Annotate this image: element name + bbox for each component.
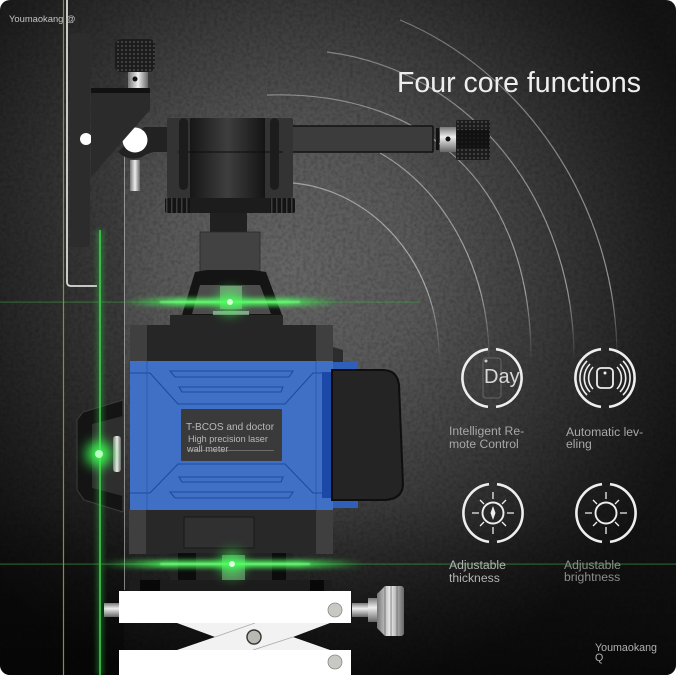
clamp slots bbox=[179, 118, 188, 190]
icon: level with signal waves bbox=[575, 349, 635, 407]
upper laser window bbox=[170, 270, 283, 325]
feature: automatic leveling bbox=[566, 349, 643, 451]
product label: wall meter bbox=[186, 444, 228, 454]
green laser beams bbox=[0, 230, 676, 675]
wall guide lines bbox=[64, 0, 124, 675]
lower housing bbox=[146, 510, 316, 554]
label: Adjustable bbox=[449, 558, 506, 572]
title: Four core functions bbox=[397, 67, 641, 99]
feature: adjustable thickness bbox=[449, 484, 523, 585]
screw bbox=[130, 160, 140, 191]
neck bbox=[210, 213, 247, 232]
vertical beam bbox=[96, 230, 104, 675]
threaded rod bbox=[104, 603, 119, 617]
blue shell bbox=[130, 361, 333, 510]
cylinder bbox=[190, 118, 265, 198]
product label: High precision laser bbox=[188, 434, 268, 444]
arm knob bbox=[456, 120, 490, 160]
pivot bolts bbox=[328, 603, 342, 617]
left lens housing bbox=[77, 400, 123, 512]
label: brightness bbox=[564, 570, 620, 584]
label: eling bbox=[566, 437, 592, 451]
black side grip bbox=[332, 370, 403, 500]
watermark: bottom right bbox=[595, 642, 657, 664]
shell embossing bbox=[130, 361, 333, 510]
label: thickness bbox=[449, 571, 500, 585]
product label: T-BCOS and doctor bbox=[186, 422, 275, 433]
lower housing panel bbox=[184, 517, 254, 548]
wall mount bracket bbox=[70, 39, 167, 247]
wall plate bbox=[70, 33, 90, 247]
label: Adjustable bbox=[564, 558, 621, 572]
lower horizontal beam bbox=[0, 551, 676, 577]
watermark: bottom right: Q bbox=[595, 652, 603, 664]
hex nut bbox=[368, 598, 378, 622]
bracket wedge bbox=[91, 90, 150, 177]
laser level body bbox=[77, 325, 403, 554]
lower laser window bbox=[129, 553, 332, 591]
icon: sun bbox=[576, 484, 636, 542]
label: mote Control bbox=[449, 437, 519, 451]
icon: sun with lens bbox=[463, 484, 523, 542]
feature: intelligent remote control bbox=[449, 349, 524, 451]
toothed ring bbox=[165, 198, 295, 213]
bottom plate bbox=[119, 650, 351, 675]
feature: adjustable brightness bbox=[564, 484, 636, 584]
adjuster knob bbox=[377, 586, 404, 636]
blue side tab bbox=[333, 362, 358, 508]
arm collar bbox=[440, 127, 457, 152]
upper horizontal beam bbox=[0, 289, 420, 315]
head housing bbox=[167, 118, 293, 198]
icon: remote with Day label: Day bbox=[484, 366, 520, 388]
label: Intelligent Re- bbox=[449, 424, 524, 438]
upper housing bbox=[147, 325, 316, 361]
swivel arm bbox=[118, 127, 167, 159]
rotating head with arm bbox=[165, 118, 490, 286]
label: Automatic lev- bbox=[566, 425, 643, 439]
side lens glow bbox=[86, 441, 112, 467]
plate pin bbox=[80, 133, 92, 145]
watermark: top left: Youmaokang @ bbox=[9, 13, 76, 24]
white ball joint bbox=[122, 128, 148, 152]
concentric signal arcs bbox=[267, 20, 617, 358]
handle shadow bbox=[322, 372, 331, 498]
scissor lift platform bbox=[104, 586, 404, 675]
top plate bbox=[119, 591, 351, 623]
watermark: bottom right: Youmaokang bbox=[595, 642, 657, 654]
support block bbox=[200, 232, 260, 272]
scissor arms bbox=[177, 623, 330, 650]
product label bbox=[181, 409, 282, 461]
long arm bbox=[282, 126, 433, 152]
top knurled knob bbox=[115, 39, 155, 88]
